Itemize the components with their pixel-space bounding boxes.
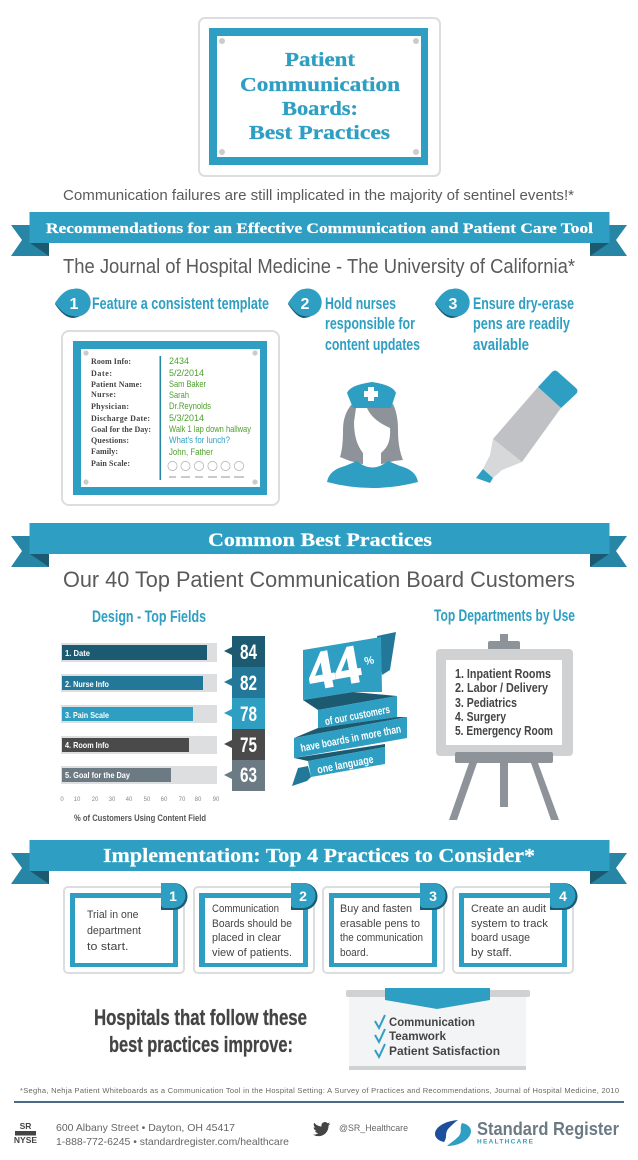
step 3 text: pens are readily (473, 314, 570, 333)
logo: Standard Register: Standard Register (477, 1119, 619, 1139)
practice card 3: erasable pens to (340, 918, 420, 930)
axis labels: 30 (109, 797, 116, 803)
board field values: 5/3/2014 (169, 413, 204, 424)
ribbon callout: 44 percent: % (363, 654, 375, 668)
practice card 2: view of patients. (212, 947, 292, 959)
ribbon: recommendations (11, 212, 627, 256)
step 3 badge: 3 (449, 296, 458, 313)
bar 2 (61, 674, 217, 692)
checklist items: Patient Satisfaction (389, 1044, 500, 1058)
board field values: Sarah (169, 390, 189, 401)
improvement statement: Hospitals that follow these (94, 1005, 307, 1030)
ribbon: common best practices: Common Best Practices (208, 530, 432, 551)
step 2 text: responsible for (325, 314, 415, 333)
board field values: Dr.Reynolds (169, 401, 211, 412)
practice card 1: Trial in one (87, 909, 138, 921)
improvement statement (94, 1005, 307, 1057)
bar 5 (61, 766, 217, 784)
board field values: 5/2/2014 (169, 368, 204, 379)
bar 1 (61, 643, 217, 662)
department list: 4. Surgery (455, 710, 506, 724)
practice card 4: system to track (471, 918, 549, 930)
step 2 text (325, 294, 420, 354)
improvement checklist banner (346, 988, 530, 1070)
title: Patient (285, 49, 355, 71)
checklist items (389, 1015, 500, 1058)
board field labels: Questions: (91, 436, 129, 445)
customers heading: Our 40 Top Patient Communication Board Customers (63, 567, 575, 592)
axis labels: 90 (213, 797, 220, 803)
value column: 82 (240, 672, 257, 695)
pain scale faces (168, 461, 244, 477)
practice card 1: to start. (87, 941, 128, 953)
department list (455, 667, 553, 738)
step 1 text: Feature a consistent template (92, 294, 269, 313)
practice card 2: Boards should be (212, 918, 292, 930)
step 1 badge (55, 288, 91, 318)
board field values: 2434 (169, 356, 189, 367)
logo: Standard Register: HEALTHCARE (477, 1138, 534, 1146)
title board (199, 18, 440, 176)
practice card 4 (453, 883, 578, 973)
board field labels: Room Info: (91, 357, 131, 366)
icon: nurse (327, 382, 418, 488)
board field values: What's for lunch? (169, 435, 230, 446)
practice card 1: department (87, 925, 141, 937)
bar 3: 3. Pain Scale (65, 710, 109, 720)
icon: twitter (313, 1122, 330, 1136)
axis labels: 0 (60, 797, 64, 803)
improvement statement: best practices improve: (109, 1032, 293, 1057)
practice card 3: 3 (429, 888, 437, 904)
board field labels: Physician: (91, 402, 129, 411)
axis labels (60, 797, 220, 803)
sample communication board (62, 331, 279, 505)
board field labels: Nurse: (91, 390, 116, 399)
bar 2: 2. Nurse Info (65, 679, 109, 689)
step 1 badge: 1 (70, 296, 79, 313)
board field labels: Discharge Date: (91, 414, 150, 423)
NYSE mark: NYSE (14, 1135, 37, 1145)
value column: 75 (240, 734, 257, 757)
bar 4 (61, 736, 217, 754)
axis labels: 50 (144, 797, 151, 803)
bar 1: 1. Date (65, 648, 90, 658)
value column: 84 (240, 641, 257, 664)
step 2 text: Hold nurses (325, 294, 396, 313)
department list: 1. Inpatient Rooms (455, 667, 551, 681)
practice card 3: the communication (340, 932, 423, 944)
NYSE mark: SR (20, 1121, 31, 1131)
practice card 3: board. (340, 947, 368, 959)
axis labels: 70 (179, 797, 186, 803)
department list: 2. Labor / Delivery (455, 681, 548, 695)
ribbon callout: 44 percent: 44 (303, 634, 365, 702)
practice card 4: board usage (471, 932, 530, 944)
contact details: 1-888-772-6245 • standardregister.com/healthcare (56, 1136, 289, 1148)
practice card 2 (194, 883, 318, 973)
step 3 text (473, 294, 574, 354)
ribbon: recommendations: Recommendations for an Effective Communication and Patient Care Tool (46, 221, 593, 237)
board field labels: Family: (91, 447, 118, 456)
title: Boards: (282, 98, 358, 120)
contact details (56, 1122, 289, 1148)
logo: Standard Register (435, 1119, 619, 1146)
board field values: Walk 1 lap down hallway (169, 424, 251, 435)
step 2 badge: 2 (301, 296, 310, 313)
ribbon: common best practices (11, 523, 627, 567)
tagline: Communication failures are still implicated in the majority of sentinel events!* (63, 187, 574, 204)
board field values: John, Father (169, 447, 213, 458)
title (240, 49, 400, 144)
ribbon: implementation (11, 840, 627, 884)
practice card 1: 1 (169, 888, 177, 904)
board field values: Sam Baker (169, 379, 206, 390)
twitter handle: @SR_Healthcare (339, 1123, 408, 1134)
bar 4: 4. Room Info (65, 740, 109, 750)
icon: dry-erase marker (476, 370, 578, 483)
practice card 3: Buy and fasten (340, 903, 412, 915)
axis labels: 60 (161, 797, 168, 803)
design heading: Design - Top Fields (92, 607, 206, 626)
step 3 badge (435, 288, 470, 318)
bar chart: top fields (60, 636, 265, 824)
practice card 4: Create an audit (471, 903, 546, 915)
axis labels: 80 (195, 797, 202, 803)
practice card 2: Communication (212, 903, 279, 915)
footnote: *Segha, Nehja Patient Whiteboards as a Communication Tool in the Hospital Setting: A Survey of Practices and Recommendations, Journal of Hospital Medicine, 2010 (20, 1086, 619, 1095)
bar 5: 5. Goal for the Day (65, 770, 130, 780)
department list: 3. Pediatrics (455, 696, 517, 710)
step 3 text: available (473, 335, 529, 354)
practice card 3 (323, 883, 448, 973)
step 2 badge (288, 288, 322, 318)
board field labels (91, 357, 151, 468)
departments heading: Top Departments by Use (434, 606, 575, 625)
ribbon: implementation: Implementation: Top 4 Practices to Consider* (103, 845, 535, 867)
practice card 4: by staff. (471, 947, 512, 959)
ribbon callout: 44 percent: of our customers (324, 704, 391, 728)
value column (224, 636, 265, 791)
bar 3 (61, 705, 217, 723)
title: Best Practices (249, 122, 390, 144)
checklist items: Teamwork (389, 1029, 446, 1043)
practice card 1 (64, 883, 188, 973)
department list: 5. Emergency Room (455, 724, 553, 738)
axis labels: 20 (92, 797, 99, 803)
board field labels: Goal for the Day: (91, 425, 151, 434)
title: Communication (240, 74, 400, 96)
axis labels: 40 (126, 797, 133, 803)
board field values (169, 356, 251, 458)
board field labels: Date: (91, 369, 112, 378)
easel: top departments (436, 634, 573, 820)
board field labels: Pain Scale: (91, 459, 130, 468)
ribbon callout: 44 percent: one language (316, 754, 375, 776)
value column: 63 (240, 764, 257, 787)
axis labels: 10 (74, 797, 81, 803)
contact details: 600 Albany Street • Dayton, OH 45417 (56, 1122, 235, 1134)
step 3 text: Ensure dry-erase (473, 294, 574, 313)
step 2 text: content updates (325, 335, 420, 354)
ribbon callout: 44 percent (292, 632, 407, 786)
practice card 4: 4 (559, 888, 567, 904)
value column: 78 (240, 703, 257, 726)
board field labels: Patient Name: (91, 380, 142, 389)
practice card 2: placed in clear (212, 932, 281, 944)
ribbon callout: 44 percent: have boards in more than (300, 723, 402, 755)
checklist items: Communication (389, 1015, 475, 1029)
journal heading: The Journal of Hospital Medicine - The University of California* (63, 256, 575, 278)
NYSE mark (14, 1121, 37, 1145)
axis title: % of Customers Using Content Field (74, 813, 206, 824)
practice card 2: 2 (299, 888, 307, 904)
checkmarks (375, 1015, 385, 1057)
